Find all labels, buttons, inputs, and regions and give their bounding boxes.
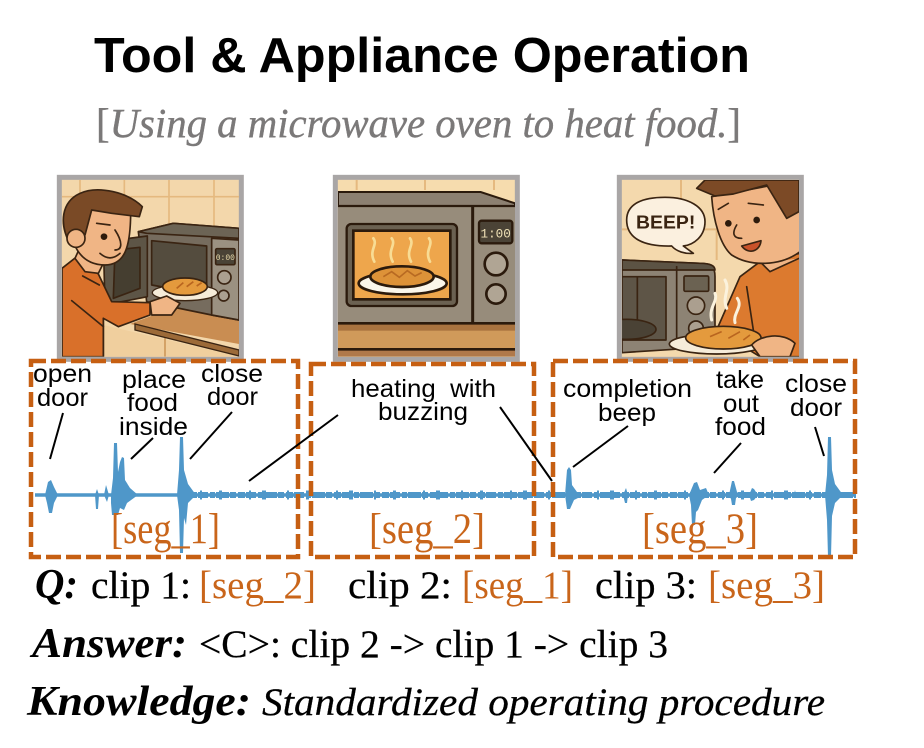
answer line: Answer: — [29, 621, 187, 667]
hand — [150, 296, 180, 315]
annotation: place food inside — [119, 366, 188, 459]
hand — [752, 336, 795, 357]
panel: microwave heating illustration — [335, 177, 517, 359]
annotation: heating with buzzing — [249, 375, 552, 481]
microwave — [622, 260, 715, 353]
annotation: close door: door — [207, 383, 258, 411]
dashed box: segment 3 — [553, 361, 855, 557]
dashed box: segment 1 — [31, 361, 298, 557]
neck and face — [74, 251, 103, 274]
annotation: completion beep: completion — [563, 375, 692, 403]
clock text: 1:00 — [480, 227, 511, 242]
knowledge line — [26, 679, 825, 725]
annotation: heating with buzzing: buzzing — [378, 398, 468, 426]
shirt — [717, 253, 800, 357]
shirt — [62, 257, 150, 357]
knowledge line: Standardized operating procedure — [262, 681, 825, 724]
title: Tool & Appliance Operation — [94, 29, 750, 83]
dashed box: segment 2 — [311, 364, 534, 557]
segment label 1: [seg_1] — [111, 506, 220, 553]
subtitle: [Using a microwave oven to heat food.] — [96, 100, 741, 146]
question line: [seg_2] — [199, 564, 316, 607]
answer line — [29, 621, 668, 667]
speech text: BEEP! — [636, 211, 695, 232]
segment label 2: [seg_2] — [369, 506, 485, 553]
microwave body — [138, 223, 239, 320]
hair — [697, 180, 799, 218]
face — [712, 180, 800, 263]
question line: clip 2: — [348, 564, 452, 607]
speech bubble — [627, 197, 705, 253]
annotation: place food inside: inside — [119, 413, 188, 441]
annotation: completion beep — [563, 375, 692, 467]
annotation: completion beep: beep — [598, 399, 656, 427]
clock display — [479, 221, 512, 243]
annotation: take out food: food — [715, 413, 766, 441]
plate and food — [152, 285, 218, 301]
annotation: close door end — [785, 370, 847, 456]
panel: completion beep illustration — [597, 177, 801, 359]
panel: opening the microwave illustration — [59, 177, 241, 359]
cabinet front — [103, 325, 239, 357]
counter — [130, 305, 239, 344]
question line: [seg_3] — [708, 564, 825, 607]
annotation: take out food: take — [716, 366, 764, 394]
answer line: <C>: clip 2 -> clip 1 -> clip 3 — [199, 623, 668, 666]
microwave clock text: 0:00 — [216, 254, 235, 263]
annotation: open door: door — [37, 384, 88, 412]
annotation: place food inside: place — [122, 366, 186, 394]
waveform — [35, 437, 856, 557]
knowledge line: Knowledge: — [26, 679, 251, 725]
question line: [seg_1] — [462, 564, 573, 607]
plate and food — [668, 336, 755, 355]
annotation: take out food: out — [723, 390, 759, 418]
steam — [372, 238, 430, 262]
hair — [63, 190, 142, 245]
question line — [35, 562, 825, 608]
steam — [711, 280, 739, 323]
question line: Q: — [35, 562, 78, 608]
annotation: open door — [33, 360, 92, 459]
annotation: place food inside: food — [127, 389, 178, 417]
segment label 3: [seg_3] — [642, 506, 758, 553]
annotation: take out food — [714, 366, 766, 473]
annotation: close door — [190, 360, 263, 459]
question line: clip 1: — [91, 564, 191, 607]
plate and food — [360, 288, 446, 294]
annotation: close door end: door — [790, 394, 842, 422]
annotation: close door end: close — [785, 370, 847, 398]
annotation: heating with buzzing: heating with — [351, 375, 496, 403]
open door — [103, 236, 147, 305]
annotation: open door: open — [33, 360, 92, 388]
annotation: close door: close — [201, 360, 263, 388]
question line: clip 3: — [595, 564, 697, 607]
